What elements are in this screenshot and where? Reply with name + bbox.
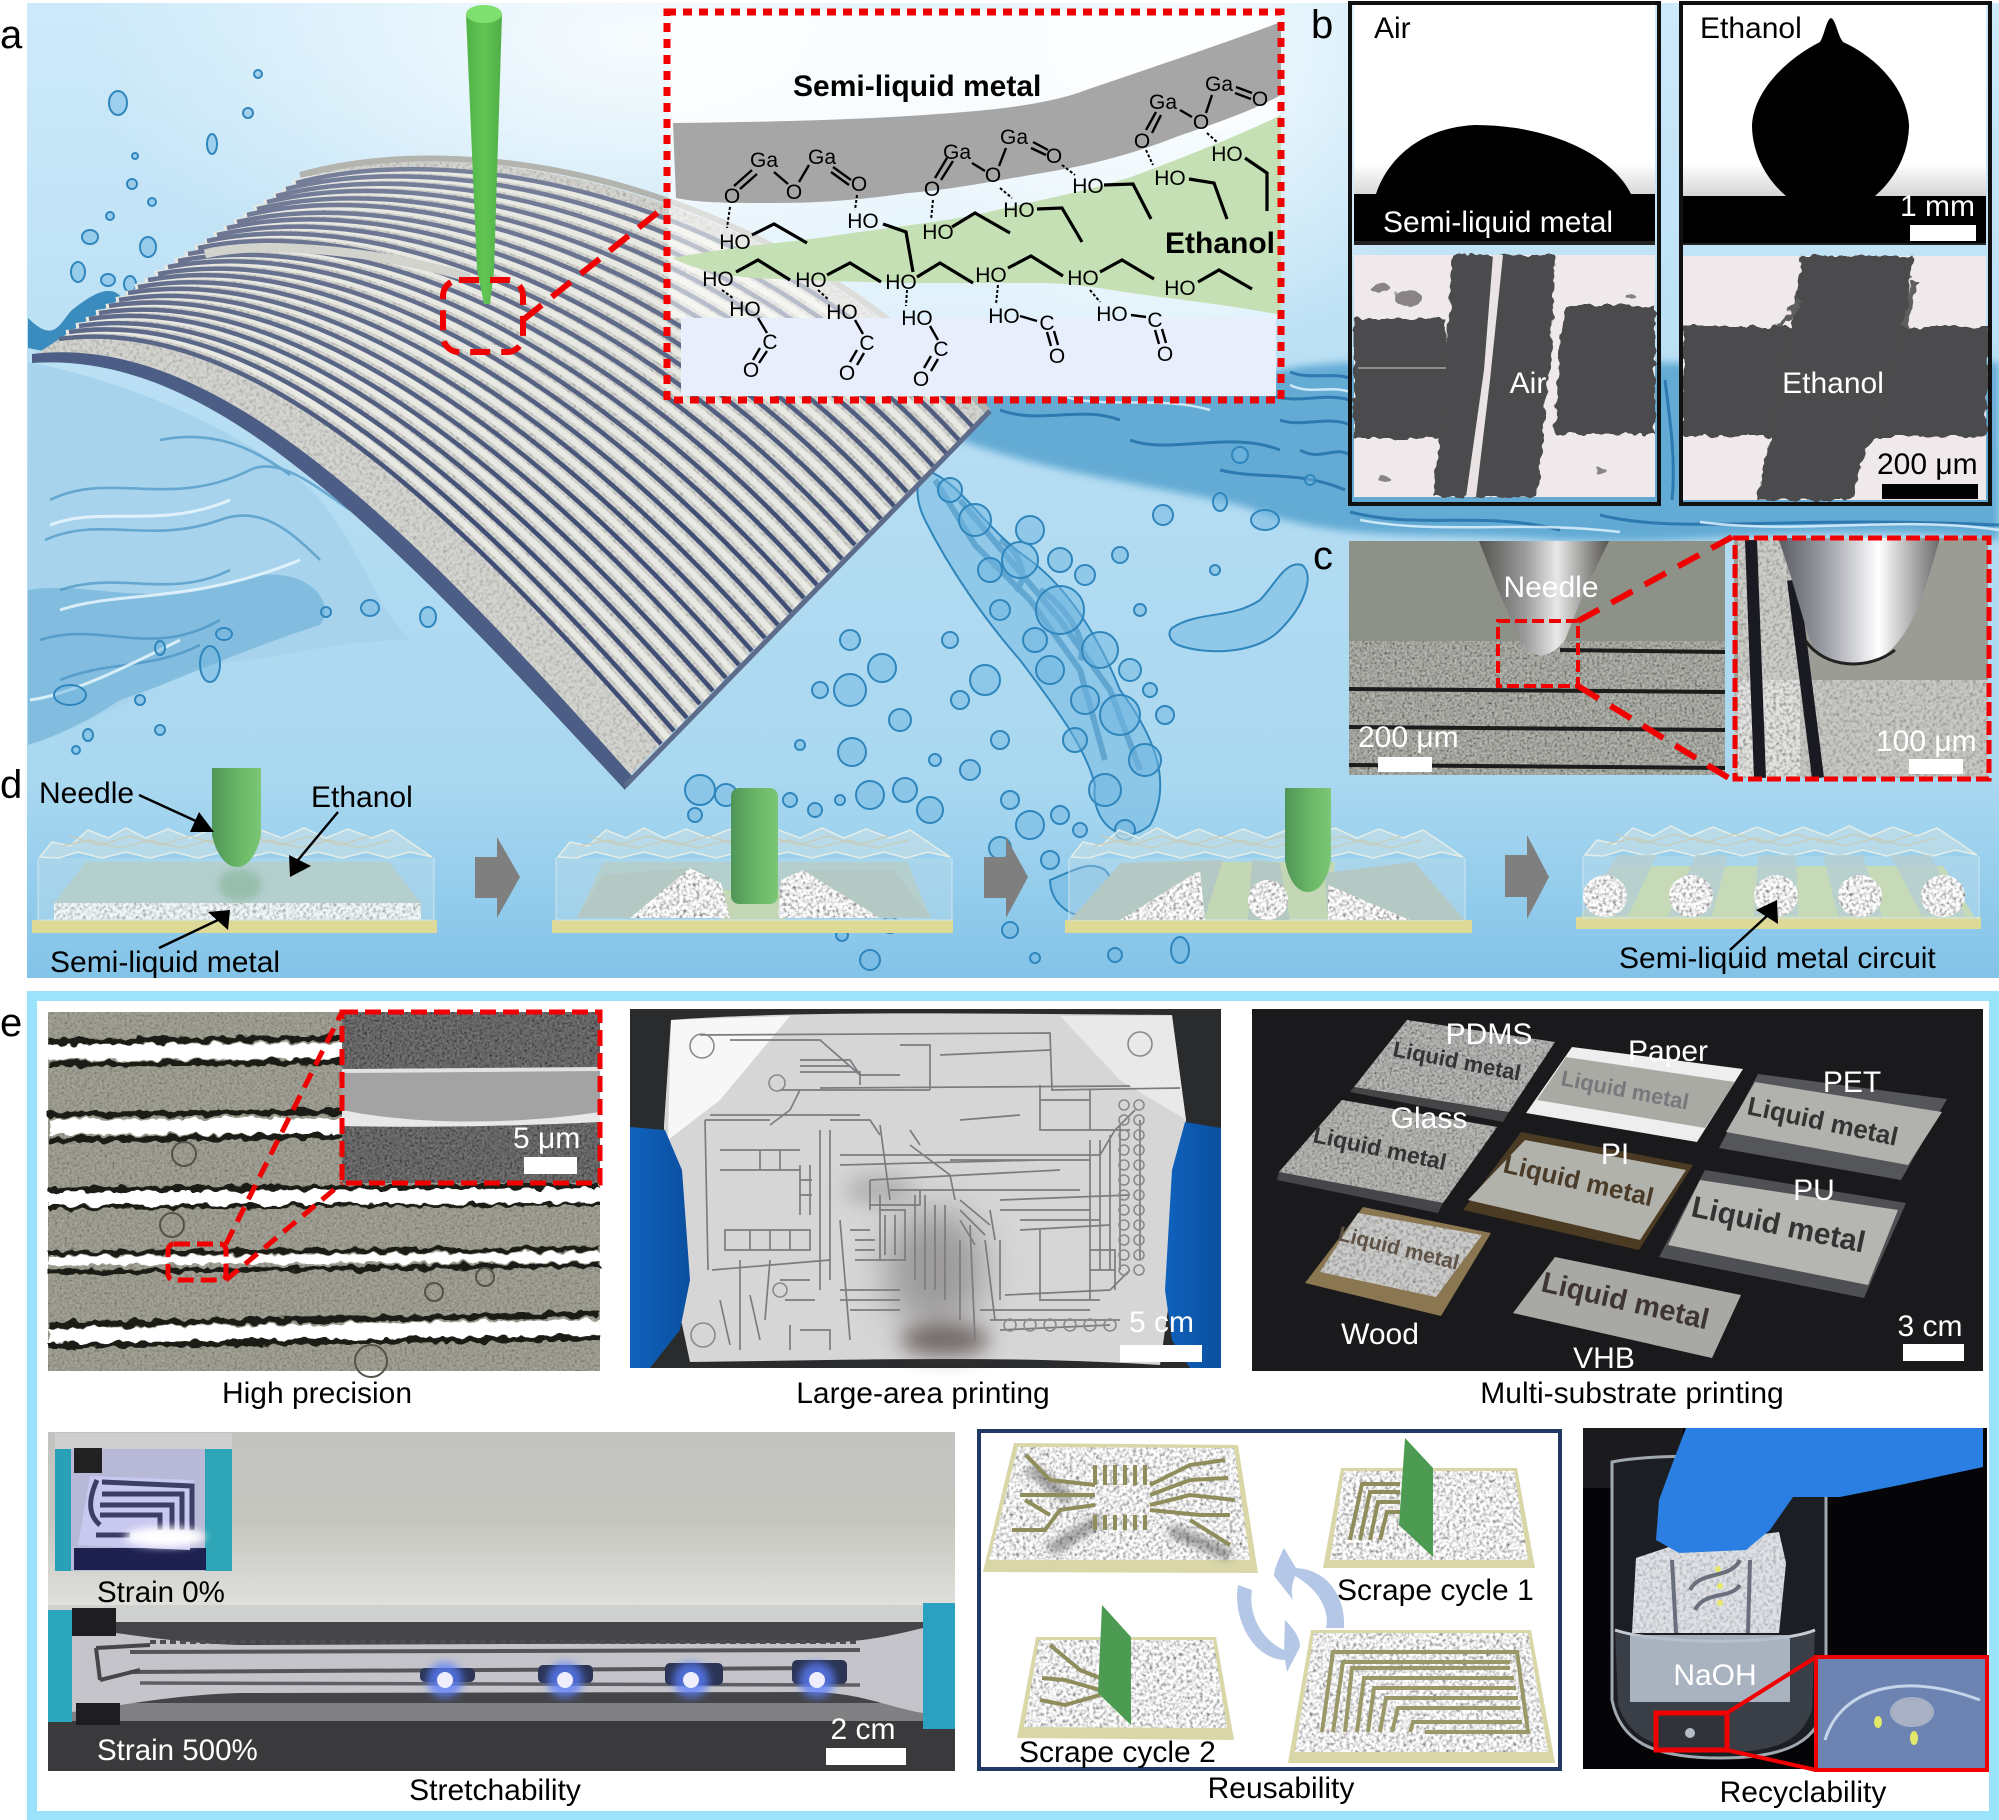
surface carboxyl groups bbox=[722, 285, 1173, 391]
sample: glass: Glass bbox=[1391, 1102, 1467, 1135]
sample: PU bbox=[1659, 1170, 1906, 1298]
sample: PET: PET bbox=[1823, 1066, 1881, 1099]
needle bbox=[1285, 788, 1331, 892]
LEDs bbox=[427, 1662, 835, 1698]
panel b: air bbox=[1350, 3, 1659, 504]
arrow: step 1 to 2 bbox=[475, 837, 520, 918]
surface carboxyl groups: HO bbox=[1096, 303, 1128, 326]
inset: strain 0% bbox=[55, 1433, 232, 1571]
sample: PI bbox=[1463, 1132, 1693, 1250]
sample: glass bbox=[1277, 1100, 1497, 1213]
scale: 2 cm bbox=[826, 1713, 906, 1765]
label: strain 0%: Strain 0% bbox=[97, 1576, 225, 1609]
surface carboxyl groups: O bbox=[743, 359, 759, 382]
panel labels: a bbox=[0, 13, 23, 57]
board: scrape cycle 1 bbox=[1323, 1438, 1535, 1568]
board: full circuit bbox=[983, 1443, 1258, 1573]
scale: 2 cm: 2 cm bbox=[830, 1713, 896, 1746]
sample: PET: Liquid metal bbox=[1745, 1091, 1901, 1152]
gallium oxide groups: O bbox=[1134, 130, 1150, 153]
panel a inset: molecular interface bbox=[667, 10, 1281, 400]
surface carboxyl groups: O bbox=[1157, 343, 1173, 366]
panel labels: e bbox=[0, 1001, 22, 1045]
panel labels bbox=[0, 3, 1333, 1045]
ethanol molecules: HO bbox=[1154, 167, 1186, 190]
sample sheet in solution bbox=[1630, 1532, 1790, 1702]
gallium oxide groups: Ga bbox=[1000, 126, 1028, 149]
scale: 200 µm bbox=[1877, 448, 1978, 499]
sample: PI: Liquid metal bbox=[1501, 1149, 1657, 1212]
needle bbox=[466, 5, 502, 304]
caption: Multi-substrate printing bbox=[1480, 1377, 1784, 1410]
arrow: step 2 to 3 bbox=[984, 837, 1028, 918]
surface carboxyl groups: O bbox=[839, 362, 855, 385]
label: needle bbox=[39, 777, 214, 832]
scale: 200 µm: 200 μm bbox=[1358, 721, 1459, 754]
beaker bbox=[1612, 1456, 1826, 1758]
caption: High precision bbox=[222, 1377, 412, 1410]
label: semi-liquid metal: Semi-liquid metal bbox=[50, 946, 280, 979]
scale: 5 cm bbox=[1120, 1306, 1202, 1362]
residue zoom inset bbox=[1656, 1657, 1987, 1770]
sample: glass: Liquid metal bbox=[1311, 1121, 1449, 1175]
background: water scene bbox=[27, 0, 1999, 978]
panel e: large-area printing bbox=[630, 1009, 1221, 1410]
panel d: step 4 bbox=[1576, 826, 1981, 975]
scale: 1 mm bbox=[1900, 190, 1976, 241]
silver traces bbox=[1582, 855, 1966, 917]
ethanol molecules: HO bbox=[975, 264, 1007, 287]
panel e: recyclability bbox=[1583, 1428, 1987, 1809]
ethanol molecules: HO bbox=[719, 231, 751, 254]
gloves bbox=[630, 1127, 690, 1368]
label: scrape cycle 2: Scrape cycle 2 bbox=[1019, 1736, 1216, 1769]
sample: PET bbox=[1719, 1066, 1947, 1180]
label: scrape cycle 1: Scrape cycle 1 bbox=[1337, 1574, 1534, 1607]
heading: ethanol: Ethanol bbox=[1165, 227, 1275, 260]
ethanol molecules: HO bbox=[702, 268, 734, 291]
microscope photo: ethanol bbox=[1683, 256, 1990, 500]
caption: Large-area printing bbox=[796, 1377, 1050, 1410]
air label: Air bbox=[1374, 12, 1411, 45]
panel e: multi-substrate printing bbox=[1252, 1009, 1983, 1410]
surface carboxyl groups: HO bbox=[729, 298, 761, 321]
sample: paper: Paper bbox=[1628, 1035, 1708, 1068]
metal band bbox=[673, 22, 1281, 203]
zoom box bbox=[168, 1244, 226, 1280]
semi-liquid metal label: Semi-liquid metal bbox=[1383, 206, 1613, 239]
ethanol band bbox=[673, 115, 1281, 315]
sample: VHB: Liquid metal bbox=[1538, 1267, 1712, 1336]
surface carboxyl groups: C bbox=[762, 331, 778, 354]
zoom box bbox=[1498, 621, 1578, 686]
gallium oxide groups: Ga bbox=[1149, 91, 1177, 114]
ethanol molecules: HO bbox=[1211, 143, 1243, 166]
SEM inset: 5 μm bbox=[513, 1122, 580, 1155]
gallium oxide groups: O bbox=[924, 178, 940, 201]
water splash on the left bbox=[28, 291, 410, 745]
gallium oxide groups bbox=[724, 73, 1268, 228]
panel e: stretchability bbox=[48, 1432, 955, 1807]
gallium oxide groups: O bbox=[851, 173, 867, 196]
panel e: high precision bbox=[48, 1012, 600, 1410]
metal ridges bbox=[577, 868, 931, 918]
panel d: step 3 bbox=[1065, 788, 1472, 933]
droplet in air bbox=[1376, 125, 1631, 194]
caption: Recyclability bbox=[1720, 1776, 1886, 1809]
scale: 200 µm: 200 μm bbox=[1877, 448, 1978, 481]
gallium oxide groups: O bbox=[724, 185, 740, 208]
gloved hand bbox=[1656, 1428, 1983, 1553]
panel labels: d bbox=[0, 763, 22, 807]
gallium oxide groups: O bbox=[985, 164, 1001, 187]
magnifier callout bbox=[443, 205, 667, 352]
label: ethanol bbox=[289, 781, 413, 877]
sample: wood: Wood bbox=[1341, 1318, 1419, 1351]
sample: PU: PU bbox=[1793, 1174, 1835, 1207]
sample: VHB: VHB bbox=[1573, 1342, 1635, 1375]
sample: paper bbox=[1526, 1035, 1743, 1142]
sample: paper: Liquid metal bbox=[1559, 1065, 1691, 1115]
ethanol molecules: HO bbox=[1003, 199, 1035, 222]
stretched device strip bbox=[72, 1628, 923, 1713]
surface carboxyl groups: HO bbox=[901, 307, 933, 330]
sample: wood bbox=[1305, 1207, 1491, 1351]
scale: 3 cm bbox=[1897, 1310, 1964, 1361]
board: blank traces bbox=[1288, 1630, 1555, 1763]
gallium oxide groups: O bbox=[1046, 145, 1062, 168]
heading: semi-liquid metal: Semi-liquid metal bbox=[793, 70, 1041, 103]
sample: VHB bbox=[1513, 1257, 1741, 1375]
printed circuit sheet bbox=[32, 159, 990, 790]
gallium oxide groups: O bbox=[1193, 111, 1209, 134]
surface carboxyl groups: O bbox=[1049, 345, 1065, 368]
surface carboxyl groups: C bbox=[1039, 312, 1055, 335]
panel labels: c bbox=[1313, 534, 1333, 578]
sample: PU: Liquid metal bbox=[1689, 1191, 1868, 1260]
ethanol molecules: HO bbox=[922, 221, 954, 244]
microscope photo: air: Air bbox=[1510, 367, 1546, 400]
gallium oxide groups: Ga bbox=[1205, 73, 1233, 96]
scale: 3 cm: 3 cm bbox=[1897, 1310, 1963, 1343]
gallium oxide groups: Ga bbox=[808, 146, 836, 169]
panel b: ethanol bbox=[1681, 3, 1990, 504]
sample: PDMS bbox=[1350, 1018, 1555, 1122]
recycle arrows bbox=[1237, 1548, 1344, 1672]
silver circuit sheet bbox=[664, 1013, 1186, 1365]
board: scrape cycle 2 bbox=[1017, 1605, 1234, 1740]
sample: PDMS: Liquid metal bbox=[1391, 1036, 1523, 1086]
label: strain 500%: Strain 500% bbox=[97, 1734, 258, 1767]
gallium oxide groups: O bbox=[786, 181, 802, 204]
microscope photo: ethanol: Ethanol bbox=[1782, 367, 1884, 400]
scale: 1 mm: 1 mm bbox=[1900, 190, 1975, 223]
panel e frame bbox=[32, 996, 1994, 1816]
droplet in ethanol bbox=[1752, 18, 1909, 196]
sample: PI: PI bbox=[1601, 1138, 1629, 1171]
needle bbox=[1479, 541, 1609, 655]
panel labels: b bbox=[1311, 3, 1333, 47]
panel c: needle photo bbox=[1349, 541, 1725, 775]
NaOH label: NaOH bbox=[1673, 1659, 1757, 1692]
ethanol molecules: HO bbox=[885, 271, 917, 294]
surface carboxyl groups: O bbox=[913, 368, 929, 391]
label: ethanol: Ethanol bbox=[311, 781, 413, 814]
gallium oxide groups: Ga bbox=[750, 149, 778, 172]
ethanol label: Ethanol bbox=[1700, 12, 1802, 45]
clamps bbox=[72, 1608, 116, 1636]
panel e: reusability bbox=[979, 1431, 1560, 1805]
scale: 200 µm bbox=[1358, 721, 1459, 772]
surface carboxyl groups: HO bbox=[826, 301, 858, 324]
panel c: needle photo: Needle bbox=[1503, 571, 1599, 604]
SEM inset bbox=[342, 1012, 600, 1183]
caption: Reusability bbox=[1208, 1772, 1354, 1805]
label: semi-liquid metal bbox=[50, 910, 280, 979]
needle bbox=[731, 788, 778, 904]
scale: 5 cm: 5 cm bbox=[1129, 1306, 1194, 1339]
ethanol molecules: HO bbox=[1067, 267, 1099, 290]
metal ridges bbox=[1070, 860, 1465, 920]
ethanol molecules: HO bbox=[1072, 175, 1104, 198]
printed lines bbox=[48, 1038, 600, 1345]
surface carboxyl groups: HO bbox=[988, 305, 1020, 328]
label: circuit bbox=[1619, 900, 1936, 975]
arrow: step 3 to 4 bbox=[1505, 835, 1549, 919]
inset frame bbox=[667, 12, 1281, 400]
label: circuit: Semi-liquid metal circuit bbox=[1619, 942, 1936, 975]
panel d: step 1 bbox=[32, 768, 437, 979]
water droplets and bubbles bbox=[54, 70, 1315, 970]
panel d: step 2 bbox=[552, 788, 953, 933]
panel c: magnified inset: 100 μm bbox=[1876, 725, 1977, 758]
sample: PDMS: PDMS bbox=[1446, 1018, 1532, 1051]
ethanol molecules: HO bbox=[795, 269, 827, 292]
ethanol molecules: HO bbox=[847, 210, 879, 233]
microscope photo: air bbox=[1354, 255, 1655, 497]
panel c: magnified inset bbox=[1578, 537, 1989, 780]
gallium oxide groups: O bbox=[1252, 88, 1268, 111]
needle bbox=[212, 768, 261, 867]
sample: wood: Liquid metal bbox=[1336, 1223, 1461, 1275]
surface carboxyl groups: C bbox=[933, 338, 949, 361]
ethanol molecules bbox=[702, 143, 1267, 300]
ethanol molecules: HO bbox=[1164, 277, 1196, 300]
caption: Stretchability bbox=[409, 1774, 581, 1807]
surface carboxyl groups: C bbox=[859, 332, 875, 355]
surface carboxyl groups: C bbox=[1147, 309, 1163, 332]
label: needle: Needle bbox=[39, 777, 134, 810]
gallium oxide groups: Ga bbox=[943, 141, 971, 164]
